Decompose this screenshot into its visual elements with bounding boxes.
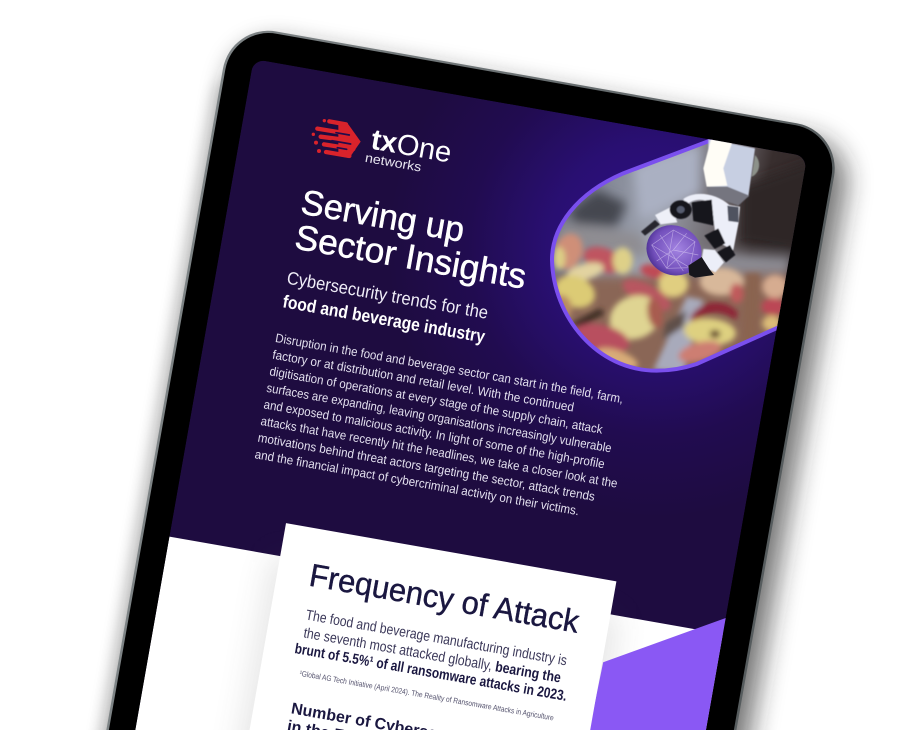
logo wordmark: txOne [369, 124, 454, 169]
intro paragraph: factory or at distribution and retail level. With the continued [271, 348, 575, 415]
section paragraph [293, 607, 574, 705]
logo networks: networks [364, 150, 423, 175]
tablet screen [102, 59, 827, 730]
section paragraph: brunt of 5.5%¹ of all ransomware attacks in 2023. [293, 641, 568, 705]
purple accent shape [590, 618, 726, 730]
robot arm [703, 139, 759, 206]
title: Serving up [298, 183, 467, 250]
logo [312, 119, 450, 172]
photo backdrop [554, 140, 806, 321]
section paragraph: The food and beverage manufacturing industry is [304, 608, 568, 669]
intro paragraph [254, 331, 633, 524]
photo border [552, 139, 780, 371]
intro paragraph: surfaces are expanding, leaving organisations increasingly vulnerable [265, 381, 613, 455]
logo icon [312, 119, 361, 158]
photo blurred scenery [555, 146, 804, 369]
card shadow [208, 555, 618, 730]
page content [135, 119, 726, 730]
robot arm and globe [639, 139, 759, 284]
photo apples [549, 230, 788, 373]
intro paragraph: and exposed to malicious activity. In light of some of the high-profile [263, 397, 606, 471]
title: Sector Insights [292, 218, 529, 297]
hero photo [550, 139, 806, 373]
subtitle: food and beverage industry [281, 291, 487, 347]
intro paragraph: digitisation of operations at every stage of the supply chain, attack [268, 364, 604, 437]
left soft shadow [70, 79, 245, 730]
tablet drop shadow [85, 36, 854, 730]
robot gripper [641, 194, 740, 272]
intro paragraph: Disruption in the food and beverage sector can start in the field, farm, [274, 331, 624, 406]
sub-heading [288, 702, 434, 730]
header background [104, 59, 807, 730]
section paragraph: the seventh most attacked globally, bearing the [302, 625, 562, 687]
white content band [103, 537, 723, 730]
title [296, 190, 525, 288]
intro paragraph: attacks that have recently hit the headlines, we take a closer look at the [260, 414, 619, 491]
subtitle: Cybersecurity trends for the [285, 268, 490, 323]
white card [213, 523, 616, 730]
globe [646, 225, 702, 276]
footnote: ¹Global AG Tech Initiative (April 2024). The Reality of Ransomware Attacks in Agriculture [299, 669, 555, 722]
section heading: Frequency of Attack [307, 557, 583, 640]
subtitle [281, 268, 491, 347]
intro paragraph: and the financial impact of cybercriminal activity on their victims. [254, 447, 580, 518]
intro paragraph: motivations behind threat actors targeting the sector, attack trends [257, 431, 596, 504]
gripper fingertip [688, 257, 714, 278]
